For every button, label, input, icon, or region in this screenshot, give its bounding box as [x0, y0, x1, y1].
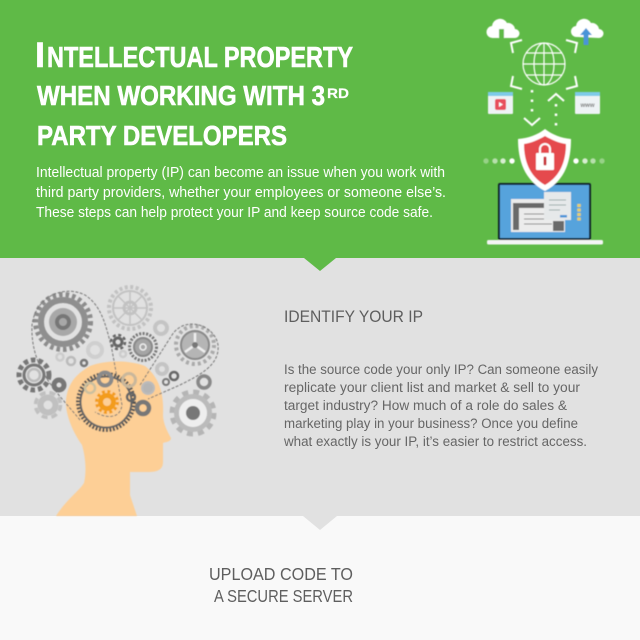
- title: [35, 36, 353, 151]
- gear: small dark: [111, 335, 125, 349]
- gear: large lower right: [172, 392, 214, 434]
- icon: video window: [488, 92, 513, 114]
- dots row: [483, 158, 605, 164]
- title: NTELLECTUAL PROPERTY: [47, 42, 353, 74]
- arrows: corner brackets around globe: [511, 40, 577, 89]
- heading: upload code to a secure server: A SECURE SERVER: [214, 586, 353, 606]
- gear: small right cluster: [157, 364, 210, 388]
- body text: identify your IP: what exactly is your IP, it’s easier to restrict access.: [283, 434, 587, 449]
- arrow: dotted down: [524, 90, 540, 125]
- icon: cloud download: [486, 19, 520, 39]
- gear: left small: [54, 380, 64, 390]
- gear: tiny row: [56, 351, 126, 366]
- panel: green header: [0, 0, 640, 271]
- gear: left medium: [19, 360, 49, 390]
- panel: grey section: [0, 258, 640, 530]
- belts: dashed: [32, 291, 218, 420]
- gear: medium centre: [130, 334, 156, 360]
- illustration: security network: [483, 19, 605, 244]
- gear: large dark: [36, 294, 90, 350]
- arrow: dotted up: [548, 94, 564, 128]
- body text: identify your IP: Is the source code your only IP? Can someone easily: [284, 362, 598, 377]
- gear: orange: [96, 392, 118, 412]
- title: PARTY DEVELOPERS: [37, 120, 287, 151]
- body text: identify your IP: target industry? How much of a role do sales &: [284, 398, 567, 413]
- intro text: These steps can help protect your IP and keep source code safe.: [36, 205, 433, 221]
- title: I: [35, 36, 45, 75]
- icon: shield with padlock: [518, 129, 571, 191]
- heading: upload code to a secure server: UPLOAD CODE TO: [209, 564, 353, 584]
- gear: right wheel: [176, 326, 214, 364]
- gears: inside head: [85, 372, 154, 414]
- icon: cloud upload: [571, 19, 604, 45]
- body text: identify your IP: replicate your client list and market & sell to your: [284, 380, 581, 395]
- icon: www window: www: [579, 103, 595, 109]
- illustration: head with gears: [19, 287, 218, 516]
- body text: identify your IP: marketing play in your business? Once you define: [284, 416, 578, 431]
- gear: left light: [36, 392, 60, 418]
- gear: top light: [109, 287, 151, 329]
- intro text: Intellectual property (IP) can become an issue when you work with: [36, 165, 445, 181]
- intro text: third party providers, whether your employees or someone else’s.: [36, 185, 446, 201]
- icon: globe: [523, 43, 565, 85]
- gear: light small centre: [88, 343, 102, 357]
- heading: identify your IP: IDENTIFY YOUR IP: [284, 308, 423, 326]
- title: WHEN WORKING WITH 3: [37, 80, 325, 111]
- gear: large ring in head: [78, 374, 134, 430]
- panel: white bottom section: [0, 516, 640, 640]
- gear: small light top right: [155, 322, 167, 334]
- heading: upload code to a secure server: [209, 564, 353, 606]
- title: RD: [327, 85, 349, 101]
- body text: identify your IP: [283, 362, 598, 449]
- intro text: [36, 165, 446, 221]
- head silhouette: [56, 362, 171, 516]
- icon: www window: [575, 92, 600, 114]
- icon: laptop: [487, 183, 603, 244]
